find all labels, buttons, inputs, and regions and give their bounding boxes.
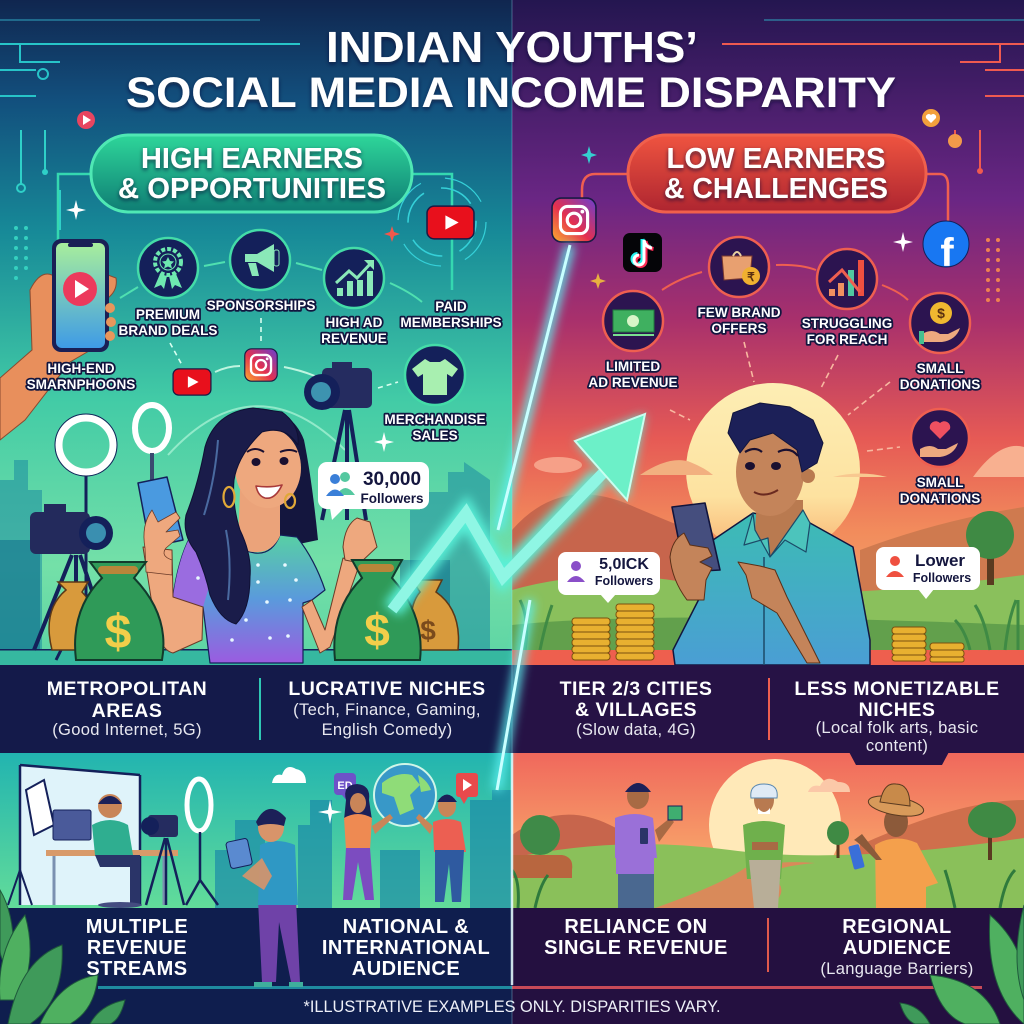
icon: limited ad revenue <box>603 291 663 351</box>
heading: high earners: & OPPORTUNITIES <box>118 173 386 205</box>
icon: instagram right <box>552 198 596 242</box>
follower badge: 30,000: Followers <box>360 491 424 506</box>
icon: small donations heart hand <box>911 409 969 467</box>
follower badge: 30,000: 30,000 <box>363 469 421 490</box>
title <box>126 23 896 117</box>
icon: few brand offers <box>709 237 769 297</box>
label: premium brand deals: BRAND DEALS <box>119 323 217 338</box>
text: tier cities: TIER 2/3 CITIES <box>560 678 712 700</box>
illustration: woman arc <box>168 406 345 455</box>
icon: high ad revenue <box>324 248 384 308</box>
icon: tiktok <box>623 233 662 272</box>
text: reliance on single revenue: SINGLE REVENUE <box>544 937 728 959</box>
illustration: cloud <box>808 779 850 792</box>
label: high ad revenue: HIGH AD <box>326 315 383 330</box>
follower badge: 5,0ICK <box>558 552 660 603</box>
panel: right background <box>512 0 1024 665</box>
panel: bottom band <box>0 908 1024 1024</box>
icon: merchandise <box>405 345 465 405</box>
illustration: bottom-left leaves <box>0 890 125 1024</box>
panel: left middle band <box>0 665 512 753</box>
icon: small youtube <box>173 369 211 395</box>
follower badge: 30,000 <box>318 462 429 520</box>
label: struggling for reach: FOR REACH <box>807 332 887 347</box>
divider and neon lines <box>497 0 570 1024</box>
money bags left: $ <box>105 606 132 659</box>
icon: small donations coin hand: $ <box>937 305 945 321</box>
money bags left: $ <box>420 615 436 646</box>
icon: small donations coin hand <box>910 293 970 353</box>
panel: right middle band <box>512 665 1024 753</box>
label: high ad revenue: REVENUE <box>321 331 387 346</box>
text: lucrative niches: LUCRATIVE NICHES <box>288 678 486 700</box>
illustration: backdrop <box>20 765 140 905</box>
follower badge: lower <box>876 547 980 599</box>
text: multiple revenue streams: REVENUE <box>87 937 187 959</box>
illustration: grass <box>520 600 1018 650</box>
label: high-end smartphones: SMARNPHOONS <box>27 377 135 392</box>
illustration: globe <box>374 764 436 826</box>
text: multiple revenue streams: MULTIPLE <box>86 916 188 938</box>
label: sponsorships: SPONSORSHIPS <box>207 298 315 313</box>
label: premium brand deals: PREMIUM <box>136 307 200 322</box>
heading: low earners: LOW EARNERS <box>666 143 886 175</box>
illustration: man <box>670 403 870 665</box>
heading: high earners <box>58 135 452 290</box>
text: metropolitan areas: METROPOLITAN <box>47 678 207 700</box>
icon: small heart badge <box>922 109 940 127</box>
text: lucrative niches: English Comedy) <box>322 720 452 739</box>
label: limited ad revenue: AD REVENUE <box>588 375 678 390</box>
circuit decorations <box>0 20 1024 230</box>
follower badge: lower: Followers <box>913 571 971 585</box>
illustration: person in purple <box>615 783 682 908</box>
label: struggling for reach: STRUGGLING <box>802 316 892 331</box>
text: multiple revenue streams: STREAMS <box>86 958 188 980</box>
decorative dots and connecting arcs <box>14 146 1000 452</box>
icon: premium brand deals <box>138 238 198 298</box>
illustration: bottom-right leaves <box>900 905 1024 1024</box>
illustration: elder with turban <box>743 784 785 908</box>
illustration: top camera on tripod <box>304 362 372 520</box>
illustration: speech bubbles: ED <box>337 780 353 792</box>
text: less monetizable niches: LESS MONETIZABLE <box>794 678 1000 700</box>
icon: small play badge <box>77 111 95 129</box>
text: less monetizable niches: content) <box>866 736 928 755</box>
illustration: camera and ring <box>141 779 218 905</box>
icon: small instagram <box>245 349 277 381</box>
text: national and international audience: AUDIENCE <box>352 958 460 980</box>
illustration: tree <box>966 511 1014 585</box>
label: small donations bottom: SMALL <box>917 475 963 490</box>
follower badge: 5,0ICK: Followers <box>595 574 653 588</box>
text: regional audience: AUDIENCE <box>843 937 951 959</box>
icon: youtube with rings <box>398 178 486 266</box>
icon: sponsorships megaphone <box>230 230 290 290</box>
icon: facebook <box>923 221 969 275</box>
text: tier cities: (Slow data, 4G) <box>576 720 696 739</box>
label: high-end smartphones: HIGH-END <box>47 361 115 376</box>
label: small donations top: SMALL <box>917 361 963 376</box>
label: paid memberships: PAID <box>435 299 467 314</box>
text: regional audience: REGIONAL <box>842 916 952 938</box>
label: small donations top: DONATIONS <box>900 377 980 392</box>
title: INDIAN YOUTHS’ <box>326 23 698 72</box>
text: reliance on single revenue: RELIANCE ON <box>564 916 708 938</box>
text: footnote: *ILLUSTRATIVE EXAMPLES ONLY. DISPARITIES VARY. <box>304 998 720 1016</box>
heading: low earners <box>582 135 948 225</box>
money bags left <box>49 560 459 660</box>
illustration: desk and creator <box>46 794 178 908</box>
label: few brand offers: OFFERS <box>711 321 767 336</box>
text: metropolitan areas: (Good Internet, 5G) <box>52 720 202 739</box>
illustration: right landscape <box>512 494 1024 665</box>
follower badge: lower: Lower <box>915 551 965 570</box>
text: tier cities: & VILLAGES <box>575 699 697 721</box>
text: less monetizable niches: NICHES <box>859 699 935 721</box>
text: regional audience: (Language Barriers) <box>820 959 974 978</box>
label: merchandise sales: MERCHANDISE <box>384 412 486 427</box>
illustration: standing person with tablet <box>226 809 303 987</box>
title: SOCIAL MEDIA INCOME DISPARITY <box>126 69 896 117</box>
illustration: city skyline left <box>0 460 490 660</box>
arrow: neon rising zigzag <box>392 414 645 610</box>
label: limited ad revenue: LIMITED <box>606 359 660 374</box>
text: national and international audience: INTERNATIONAL <box>322 937 490 959</box>
illustration: sun <box>686 383 860 557</box>
panel: left background <box>0 0 512 665</box>
illustration: ground strip left <box>0 649 512 665</box>
icon: smartphone in hand <box>0 239 116 440</box>
illustration: man talking <box>416 794 466 902</box>
icon: facebook: f <box>940 231 954 275</box>
money bags left: $ <box>364 604 390 656</box>
text: national and international audience: NATIONAL & <box>343 916 469 938</box>
illustration: ring lights <box>55 405 169 660</box>
label: few brand offers: FEW BRAND <box>697 305 781 320</box>
illustration: cloud <box>272 767 306 783</box>
text: metropolitan areas: AREAS <box>92 700 162 722</box>
text: lucrative niches: (Tech, Finance, Gaming, <box>293 700 481 719</box>
illustration: clouds <box>534 446 1024 477</box>
panel: left lower scene <box>0 753 512 908</box>
illustration: speech bubbles <box>334 773 478 804</box>
panel: notch for less monetizable niches <box>794 665 1000 765</box>
label: paid memberships: MEMBERSHIPS <box>400 315 502 330</box>
coin stacks <box>572 604 964 662</box>
label: small donations bottom: DONATIONS <box>900 491 980 506</box>
label: merchandise sales: SALES <box>412 428 458 443</box>
follower badge: 5,0ICK: 5,0ICK <box>599 556 649 573</box>
icon: struggling for reach <box>817 249 877 309</box>
panel: right lower scene <box>512 753 1024 908</box>
illustration: woman talking <box>343 784 393 900</box>
illustration: left camera on tripod <box>30 504 113 650</box>
icon: few brand offers: ₹ <box>747 270 755 284</box>
text: less monetizable niches: (Local folk arts, basic <box>816 718 978 737</box>
illustration: man with hat <box>848 784 938 908</box>
heading: low earners: & CHALLENGES <box>664 173 888 205</box>
illustration: woman <box>138 408 377 663</box>
heading: high earners: HIGH EARNERS <box>141 143 363 175</box>
